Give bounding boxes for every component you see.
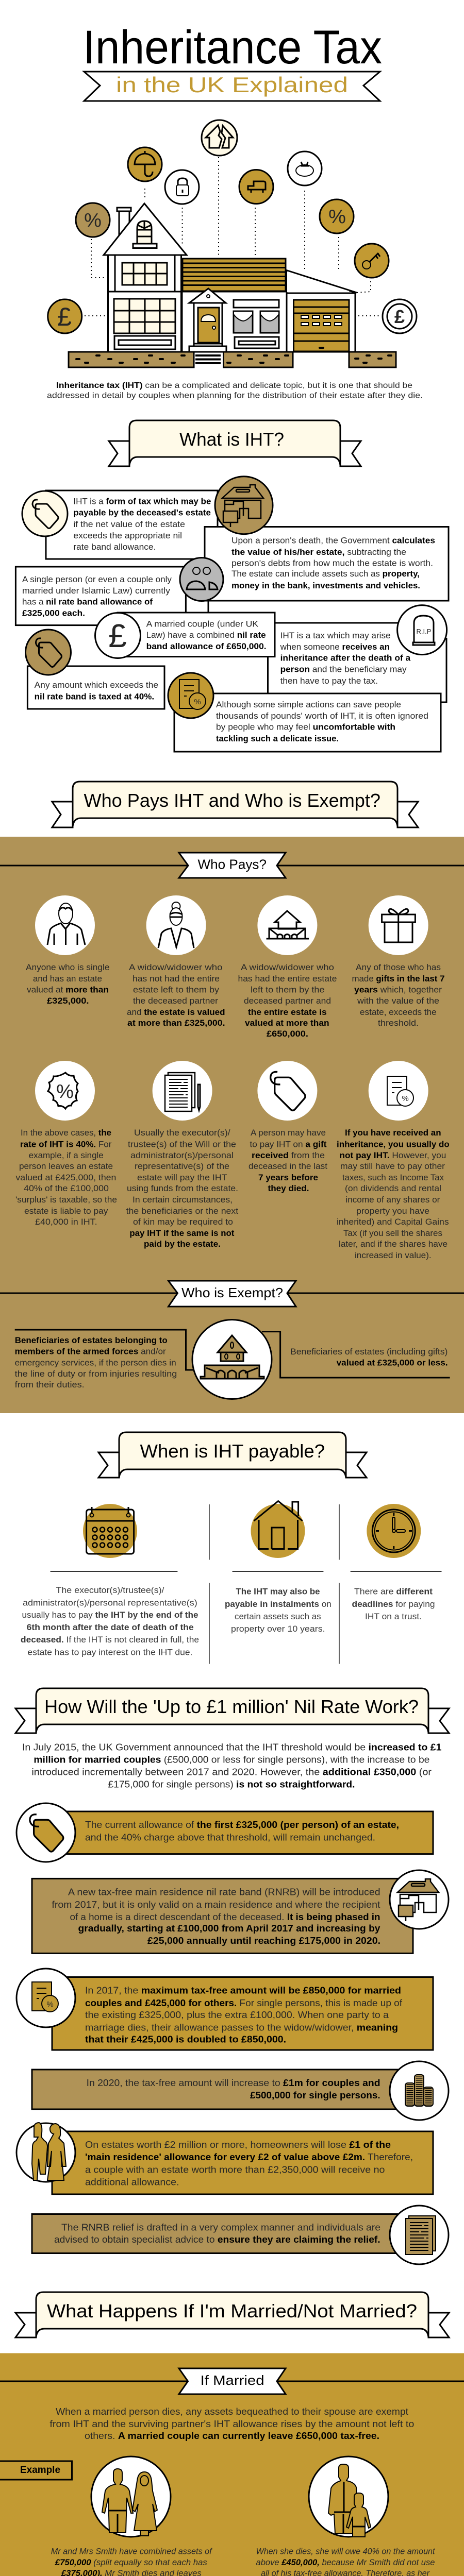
item: rate of IHT: valued at £425,000, then <box>15 1173 116 1182</box>
item: inheritance received: property you have <box>356 1206 429 1216</box>
icon: pound balloon: £ <box>57 302 72 331</box>
box: often ignored: thousands of pounds' worth of IHT, it is often ignored <box>216 711 428 721</box>
box: often ignored <box>174 693 441 752</box>
item: executor: representative(s) of the <box>135 1161 229 1171</box>
item: single person: valued at more than <box>27 985 109 994</box>
intro: nil rate announcement: introduced incrementally between 2017 and 2020. However, the additional £350,000 (or <box>31 1767 432 1777</box>
panel: estates over 2 million: On estates worth £2 million or more, homeowners will lose £1 of the <box>85 2139 391 2150</box>
text: low value exemption <box>290 1347 448 1368</box>
box: estate value: money in the bank, investments and vehicles. <box>231 581 420 590</box>
porch and door <box>189 289 226 352</box>
text: six months: deceased. If the IHT is not cleared in full, the <box>21 1635 199 1645</box>
heading: What Happens If I'm Married/Not Married? <box>15 2292 449 2337</box>
item: gift received: A person may have <box>251 1128 326 1138</box>
box: married couple: band allowance of £650,000. <box>146 641 267 651</box>
panel: estates over 2 million: a couple with an estate worth more than £2,350,000 will receive no <box>85 2164 385 2175</box>
label: If Married: If Married <box>201 2372 264 2388</box>
box: single person: has a nil rate band allowance of <box>22 597 153 607</box>
item: inheritance received: If you have received an <box>345 1128 441 1138</box>
heading: How Will the Up to £1 million Nil Rate Work? <box>15 1688 449 1733</box>
label: Example: Example <box>20 2465 60 2476</box>
label: Who Pays?: Who Pays? <box>198 856 267 872</box>
box: form of tax: IHT is a form of tax which may be <box>73 497 211 506</box>
box: exceeds nil rate: Any amount which exceeds the <box>35 680 158 690</box>
item: inheritance received: increased in value). <box>355 1250 432 1260</box>
icon: pound <box>95 613 140 658</box>
panel: 2020 amount: £500,000 for single persons. <box>250 2090 380 2100</box>
box: often ignored: tackling such a delicate issue. <box>216 734 339 743</box>
icon: gravestone: R.I.P <box>417 628 431 635</box>
text: example part 2: When she dies, she will owe 40% on the amount <box>256 2546 436 2556</box>
item: rate of IHT: estate is liable to pay <box>24 1206 108 1216</box>
item: single person: £325,000. <box>47 996 89 1006</box>
garage door <box>294 300 349 351</box>
panel: married band <box>0 2353 464 2576</box>
icon: car balloon <box>239 170 273 204</box>
text: example part 1: £750,000 (split equally so that each has <box>55 2557 207 2567</box>
panel: current allowance: and the 40% charge above that threshold, will remain unchanged. <box>85 1832 375 1842</box>
text: married explanation: from IHT and the surviving partner's IHT allowance rises by the amount not left to <box>49 2418 414 2429</box>
panel: who pays tan band <box>0 837 464 1413</box>
exempt brackets <box>15 1330 450 1378</box>
item: rate of IHT: example, if a single <box>29 1150 104 1160</box>
item: entire estate: deceased partner and <box>244 996 331 1006</box>
heading: Who Pays IHT and Who is Exempt? <box>52 782 418 827</box>
item: executor: administrator(s)/personal <box>130 1150 234 1160</box>
panel: 2017 maximum: In 2017, the maximum tax-free amount will be £850,000 for married <box>85 1985 401 1996</box>
item: single person <box>26 895 109 1006</box>
item: executor: paid by the estate. <box>144 1239 221 1249</box>
icon: wedding couple <box>16 2123 75 2182</box>
item: gift received: to pay IHT on a gift <box>250 1139 327 1149</box>
icon: coin stacks <box>390 2061 449 2120</box>
box: married couple: A married couple (under UK <box>146 619 259 629</box>
box: estate value <box>205 527 449 601</box>
intro text <box>47 381 423 400</box>
item: gifts: with the value of the <box>357 996 439 1006</box>
item: entire estate: A widow/widower who <box>241 962 334 972</box>
text: six months: 6th month after the date of death of the <box>27 1622 194 1632</box>
icon: tax document: % <box>46 2000 54 2009</box>
heading: What is IHT? <box>109 420 361 466</box>
item: gift received: received from the <box>252 1150 325 1160</box>
item: inheritance received: inheritance, you usually do <box>337 1139 450 1149</box>
box: form of tax: if the net value of the estate <box>73 519 185 529</box>
panel: 2020 amount: In 2020, the tax-free amount will increase to £1m for couples and <box>87 2077 380 2088</box>
item: single person: and has an estate <box>33 974 102 984</box>
text: low value exemption: valued at £325,000 or less. <box>337 1358 448 1368</box>
item: inheritance received: income of any shares or <box>345 1195 440 1205</box>
box: exceeds nil rate: nil rate band is taxed at 40%. <box>35 691 154 702</box>
item: gifts: Any of those who has <box>356 962 441 972</box>
icon: tax document gold: % <box>194 698 201 706</box>
icon: tag cream <box>22 491 68 536</box>
curtain windows <box>234 311 279 333</box>
box: single person <box>15 567 186 625</box>
panel: when payable <box>21 1501 441 1664</box>
icon: tag <box>16 1803 75 1862</box>
icon: people grey <box>180 557 223 613</box>
item: executor: Usually the executor(s)/ <box>134 1128 230 1138</box>
text: six months: estate has to pay interest on the IHT due. <box>27 1648 192 1657</box>
item: entire estate: has had the entire estate <box>238 974 337 984</box>
item: gift received: 7 years before <box>258 1173 318 1182</box>
box: married couple <box>118 613 275 657</box>
box: IHT may arise: inheritance after the death of a <box>280 653 411 663</box>
item: entire estate: valued at more than <box>245 1018 329 1028</box>
text: instalments: payable in instalments on <box>225 1599 332 1609</box>
icon: percent balloon gold <box>320 199 354 233</box>
icon: pound coin balloon <box>383 299 417 333</box>
text: example part 2: above £450,000, because Mr Smith did not use <box>256 2557 435 2567</box>
dotted connectors <box>85 157 379 316</box>
item: rate of IHT: rate of IHT is 40%. For <box>20 1139 112 1149</box>
box: estate value: Upon a person's death, the Government calculates <box>231 536 435 546</box>
item: gifts: threshold. <box>378 1018 419 1028</box>
panel: what is IHT boxes <box>15 477 449 752</box>
panel: RNRB introduced: from 2017, but it is only valid on a main residence and where the recipient <box>52 1899 380 1910</box>
icon: house <box>251 1501 305 1558</box>
item: widow: at more than £325,000. <box>127 1018 225 1028</box>
box: estate value: The estate can include assets such as property, <box>231 569 420 579</box>
text: armed forces exemption: the line of duty or from injuries resulting <box>15 1369 177 1379</box>
panel: estates over 2 million: additional allowance. <box>85 2176 179 2187</box>
panel: RNRB relief advice <box>32 2206 449 2264</box>
text: married explanation: When a married person dies, any assets bequeathed to their spouse are exempt <box>56 2406 408 2417</box>
intro: nil rate announcement: million for married couples (£500,000 or less for single persons), with the increase to be <box>34 1754 429 1765</box>
text: instalments: property over 10 years. <box>231 1624 325 1634</box>
box: estate value: the value of his/her estate, subtracting the <box>231 547 406 557</box>
item: inheritance received: later, and if the shares have <box>339 1239 448 1249</box>
gable roof <box>104 204 187 255</box>
text: married explanation <box>49 2406 414 2441</box>
icon: percent balloon gold: % <box>328 206 346 228</box>
label: Example <box>0 2461 72 2480</box>
text: instalments: The IHT may also be <box>236 1587 320 1597</box>
item: executor: trustee(s) of the Will or the <box>128 1139 236 1149</box>
item: inheritance received: (on dividends and rental <box>345 1183 441 1193</box>
striped roof <box>183 259 286 291</box>
panel: RNRB introduced: A new tax-free main residence nil rate band (RNRB) will be introduced <box>68 1887 380 1897</box>
text: trust deadlines: There are different <box>354 1587 433 1597</box>
item: gift received: deceased in the last <box>248 1161 327 1171</box>
heading: What is IHT?: What is IHT? <box>179 429 284 450</box>
item: widow: has not had the entire <box>132 974 220 984</box>
intro: nil rate announcement: In July 2015, the UK Government announced that the IHT threshold would be increased to £1 <box>22 1741 441 1753</box>
text: armed forces exemption: Beneficiaries of estates belonging to <box>15 1335 168 1345</box>
item: rate of IHT <box>15 1061 117 1227</box>
box: IHT may arise <box>268 623 446 702</box>
item: inheritance received: taxes, such as Income Tax <box>342 1173 444 1182</box>
heading: What Happens If I'm Married/Not Married?: What Happens If I'm Married/Not Married? <box>47 2300 417 2321</box>
item: rate of IHT: £40,000 in IHT. <box>35 1217 97 1227</box>
panel: current allowance: The current allowance of the first £325,000 (per person) of an estate, <box>85 1819 399 1830</box>
item: executor: estate will pay the IHT <box>137 1173 227 1182</box>
panel: RNRB introduced: gradually, starting at £100,000 from April 2017 and increasing by <box>78 1923 380 1934</box>
label: Who is Exempt? <box>169 1281 296 1307</box>
panel: estates over 2 million <box>16 2123 433 2194</box>
box: IHT may arise: when someone receives an <box>280 642 390 652</box>
icon: padlock balloon <box>165 170 199 204</box>
item: single person: Anyone who is single <box>26 962 109 972</box>
item: entire estate: left to them by the <box>251 985 325 994</box>
intro text: Inheritance tax (IHT) can be a complicated and delicate topic, but it is one that should be <box>56 381 412 390</box>
subtitle ribbon <box>84 72 380 101</box>
icon: clock <box>367 1504 421 1558</box>
item: executor: using funds from the estate. <box>127 1183 238 1193</box>
icon: percent balloon tan <box>76 203 110 237</box>
heading: When is IHT payable?: When is IHT payable? <box>140 1440 325 1462</box>
item: widow <box>127 895 225 1028</box>
box: single person: A single person (or even a couple only <box>22 574 172 584</box>
icon: house plan tan <box>215 477 273 534</box>
box: form of tax <box>46 490 218 559</box>
box: married couple: Law) have a combined nil rate <box>146 630 266 640</box>
item: rate of IHT: In the above cases, the <box>21 1128 111 1138</box>
panel: RNRB introduced: of a home is a direct descendant of the deceased. It is being phased in <box>70 1911 380 1922</box>
item: gifts: estate, exceeds the <box>360 1007 437 1017</box>
panel: 2017 maximum <box>16 1969 433 2050</box>
text: armed forces exemption: emergency services, if the person dies in <box>15 1358 176 1368</box>
icon: widower and child <box>309 2456 388 2537</box>
text: trust deadlines: deadlines for paying <box>352 1599 435 1609</box>
item: executor: the beneficiaries or the next <box>126 1206 238 1216</box>
panel: 2017 maximum: that their £425,000 is doubled to £850,000. <box>85 2034 286 2045</box>
box: form of tax: payable by the deceased's estate <box>73 508 211 518</box>
item: gift received <box>248 1061 327 1193</box>
box: estate value: person's debts from how much the estate is worth. <box>231 558 433 568</box>
item: entire estate: the entire estate is <box>248 1007 327 1017</box>
item: widow: estate left to them by <box>133 985 220 994</box>
text: six months: administrator(s)/personal representative(s) <box>23 1598 197 1607</box>
label: Who is Exempt?: Who is Exempt? <box>181 1285 283 1300</box>
box: IHT may arise: person and the beneficiary may <box>280 665 407 674</box>
text: six months: The executor(s)/trustee(s)/ <box>56 1585 164 1595</box>
panel: RNRB introduced: £25,000 annually until reaching £175,000 in 2020. <box>147 1935 380 1946</box>
item: widow: the deceased partner <box>133 996 218 1006</box>
box: often ignored: Although some simple actions can save people <box>216 700 401 709</box>
text: armed forces exemption: members of the armed forces and/or <box>15 1347 166 1357</box>
chimney <box>117 208 131 236</box>
heading: Who Pays IHT and Who is Exempt?: Who Pays IHT and Who is Exempt? <box>84 790 380 811</box>
heading: How Will the Up to £1 million Nil Rate Work?: How Will the 'Up to £1 million' Nil Rate Work? <box>44 1696 419 1717</box>
panel: 2020 amount <box>32 2061 449 2120</box>
item: rate of IHT: % <box>56 1081 74 1103</box>
label: Who Pays? <box>179 853 286 878</box>
icon: purse balloon <box>288 151 322 185</box>
icon: calendar <box>83 1504 137 1558</box>
panel: estates over 2 million: 'main residence' allowance for every £2 of value above £2m. Therefore, <box>85 2151 413 2162</box>
item: gifts: years which, together <box>354 985 442 994</box>
item: widow: and the estate is valued <box>127 1007 225 1017</box>
icon: gravestone <box>397 605 447 655</box>
ground and steps <box>69 352 396 367</box>
text: example part 1: Mr and Mrs Smith have combined assets of <box>51 2546 213 2556</box>
box: IHT may arise: then have to pay the tax. <box>280 676 378 686</box>
box: form of tax: exceeds the appropriate nil <box>73 531 182 540</box>
icon: tax document gold <box>168 673 213 718</box>
box: single person: married under Islamic Law) currently <box>22 586 171 596</box>
box: IHT may arise: IHT is a tax which may arise <box>280 631 391 640</box>
intro: nil rate announcement <box>22 1741 441 1790</box>
text: trust deadlines: IHT on a trust. <box>365 1612 422 1621</box>
icon: tax document <box>16 1969 75 2027</box>
text: six months <box>21 1585 199 1657</box>
icon: percent balloon tan: % <box>84 210 102 231</box>
item: gifts: made gifts in the last 7 <box>352 974 444 984</box>
box: often ignored: by people who may feel uncomfortable with <box>216 722 395 732</box>
panel: current allowance <box>16 1803 433 1862</box>
icon: house plan <box>390 1870 449 1929</box>
text: example part 2 <box>256 2546 436 2576</box>
text: armed forces exemption: from their duties. <box>15 1380 85 1389</box>
icon: cracked house balloon <box>202 120 237 156</box>
item: entire estate: £650,000. <box>267 1029 308 1039</box>
icon: Mr and Mrs Smith <box>91 2456 171 2537</box>
label: If Married <box>179 2368 286 2394</box>
text: married explanation: others. A married couple can currently leave £650,000 tax-free. <box>85 2430 379 2441</box>
item: executor: In certain circumstances, <box>132 1195 233 1205</box>
icon: key balloon <box>355 244 389 278</box>
panel: RNRB relief advice: The RNRB relief is drafted in a very complex manner and individuals are <box>61 2222 380 2233</box>
box: form of tax: rate band allowance. <box>73 542 156 552</box>
icon: pound: £ <box>108 617 127 654</box>
text: six months: usually has to pay the IHT by the end of the <box>22 1610 198 1620</box>
item: rate of IHT: 40% of the £100,000 <box>24 1183 109 1193</box>
house illustration <box>69 204 396 367</box>
panel: 2017 maximum: the existing £325,000, plus the extra £100,000. When one party to a <box>85 2009 389 2020</box>
item: executor: of kin may be required to <box>133 1217 233 1227</box>
icon: document <box>390 2206 449 2264</box>
icon: tag tan <box>26 630 71 675</box>
subtitle ribbon: in the UK Explained <box>116 73 348 97</box>
item: rate of IHT: person leaves an estate <box>19 1161 113 1171</box>
item: widow: A widow/widower who <box>129 962 223 972</box>
panel: RNRB introduced <box>32 1870 449 1953</box>
icon: umbrella balloon <box>128 147 162 181</box>
item: gifts <box>352 895 444 1028</box>
text: armed forces exemption <box>15 1335 177 1389</box>
panel: 2017 maximum: couples and £425,000 for others. For single persons, this is made up of <box>85 1997 403 2008</box>
icon: pound coin balloon: £ <box>394 306 405 327</box>
text: low value exemption: Beneficiaries of estates (including gifts) <box>290 1347 448 1357</box>
box: exceeds nil rate <box>27 666 164 709</box>
item: inheritance received: not pay IHT. However, you <box>339 1150 446 1160</box>
item: inheritance received: % <box>402 1094 409 1103</box>
box: single person: £325,000 each. <box>22 608 85 618</box>
item: executor <box>126 1061 238 1249</box>
panel: 2017 maximum: marriage dies, their allowance passes to the widow/widower, meaning <box>85 2022 398 2032</box>
item: executor: pay IHT if the same is not <box>129 1228 235 1238</box>
panel: RNRB relief advice: advised to obtain specialist advice to ensure they are claiming the relief. <box>54 2234 380 2245</box>
item: inheritance received <box>337 1061 450 1260</box>
icon: exempt building <box>192 1320 272 1399</box>
item: inheritance received: Tax (if you sell the shares <box>343 1228 442 1238</box>
intro text: addressed in detail by couples when planning for the distribution of their estate after they die. <box>47 392 423 400</box>
heading: When is IHT payable? <box>98 1432 367 1478</box>
text: trust deadlines <box>352 1587 435 1621</box>
intro: nil rate announcement: £175,000 for single persons) is not so straightforward. <box>108 1779 355 1790</box>
item: entire estate <box>238 895 337 1039</box>
item: rate of IHT: 'surplus' is taxable, so the <box>15 1195 117 1205</box>
item: inheritance received: may still have to pay other <box>340 1161 445 1171</box>
item: gift received: they died. <box>268 1183 309 1193</box>
item: inheritance received: inherited) and Capital Gains <box>337 1217 449 1227</box>
text: example part 1 <box>45 2546 218 2576</box>
icon: pound balloon <box>48 299 82 333</box>
text: instalments <box>225 1587 332 1634</box>
text: instalments: certain assets such as <box>235 1612 321 1621</box>
title: Inheritance Tax <box>83 21 382 74</box>
